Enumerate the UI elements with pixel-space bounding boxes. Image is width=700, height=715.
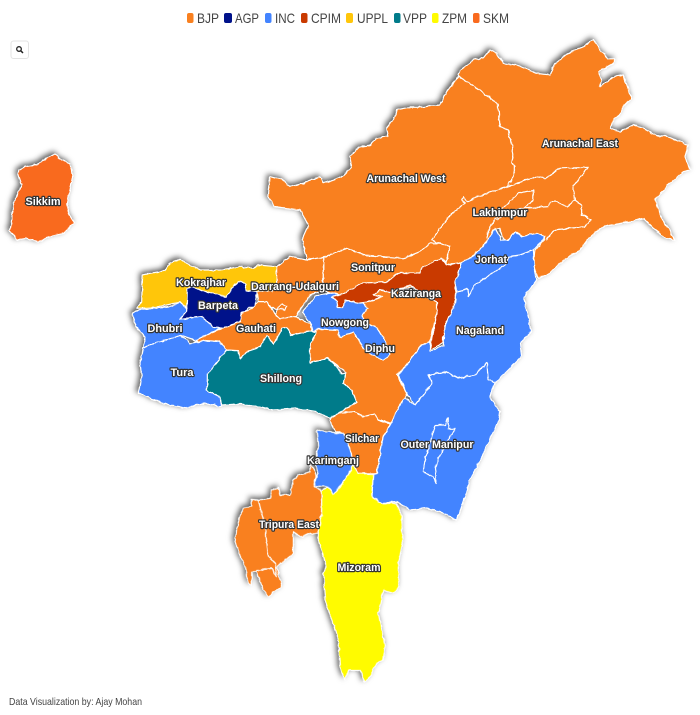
region: Shillong xyxy=(207,327,357,418)
region: Kokrajhar xyxy=(137,259,277,308)
region: Jorhat xyxy=(455,228,545,296)
legend: AGP xyxy=(235,10,259,26)
region: Diphu xyxy=(310,290,440,423)
constituency labels: Jorhat xyxy=(475,254,507,266)
constituency labels: Arunachal West xyxy=(366,173,446,185)
legend: BJP xyxy=(197,10,219,26)
region: Outer Manipur xyxy=(372,363,500,520)
legend xyxy=(187,10,509,26)
constituency labels: Nagaland xyxy=(456,325,504,337)
region: Tripura East xyxy=(235,463,322,597)
region: Kaziranga xyxy=(332,258,462,350)
region: Arunachal West, Arunachal East and Lakhimpur xyxy=(268,40,690,293)
constituency labels: Diphu xyxy=(365,343,395,355)
region: Gauhati xyxy=(197,302,312,358)
constituency labels: Shillong xyxy=(260,373,302,385)
legend: ZPM xyxy=(442,10,467,26)
constituency labels: Dhubri xyxy=(148,323,182,335)
constituency labels: Barpeta xyxy=(198,300,239,312)
constituency labels: Outer Manipur xyxy=(400,439,474,451)
constituency labels: Karimganj xyxy=(307,455,359,467)
constituency labels: Darrang-Udalguri xyxy=(251,281,339,293)
region: Sonitpur xyxy=(323,243,450,298)
region: Mizoram xyxy=(318,465,403,682)
constituency labels: Tura xyxy=(170,367,194,379)
region: Nagaland xyxy=(398,250,537,405)
constituency labels: Lakhimpur xyxy=(472,207,528,219)
constituency labels: Silchar xyxy=(345,433,380,445)
region: Dhubri and Tura xyxy=(133,302,227,408)
constituency labels: Kokrajhar xyxy=(176,277,227,289)
legend: CPIM xyxy=(311,10,341,26)
icon: search button xyxy=(11,41,28,58)
legend: UPPL xyxy=(357,10,388,26)
region: Barpeta xyxy=(180,282,257,328)
constituency labels: Mizoram xyxy=(338,562,381,574)
constituency labels: Sikkim xyxy=(26,196,61,208)
constituency labels xyxy=(26,138,618,574)
constituency labels: Tripura East xyxy=(259,519,319,531)
constituency labels: Nowgong xyxy=(321,317,369,329)
legend: INC xyxy=(275,10,295,26)
constituency labels: Sonitpur xyxy=(351,262,396,274)
region: Karimganj xyxy=(313,430,353,495)
region: Sikkim xyxy=(10,154,74,242)
legend: SKM xyxy=(483,10,509,26)
region: Darrang-Udalguri xyxy=(257,257,323,318)
constituency labels: Kaziranga xyxy=(391,288,442,300)
constituency labels: Gauhati xyxy=(236,323,276,335)
region: Nowgong xyxy=(302,293,390,360)
legend: VPP xyxy=(403,10,427,26)
constituency labels: Arunachal East xyxy=(542,138,618,150)
region: Silchar xyxy=(330,412,391,473)
credit text: Data Visualization by: Ajay Mohan xyxy=(9,696,142,708)
